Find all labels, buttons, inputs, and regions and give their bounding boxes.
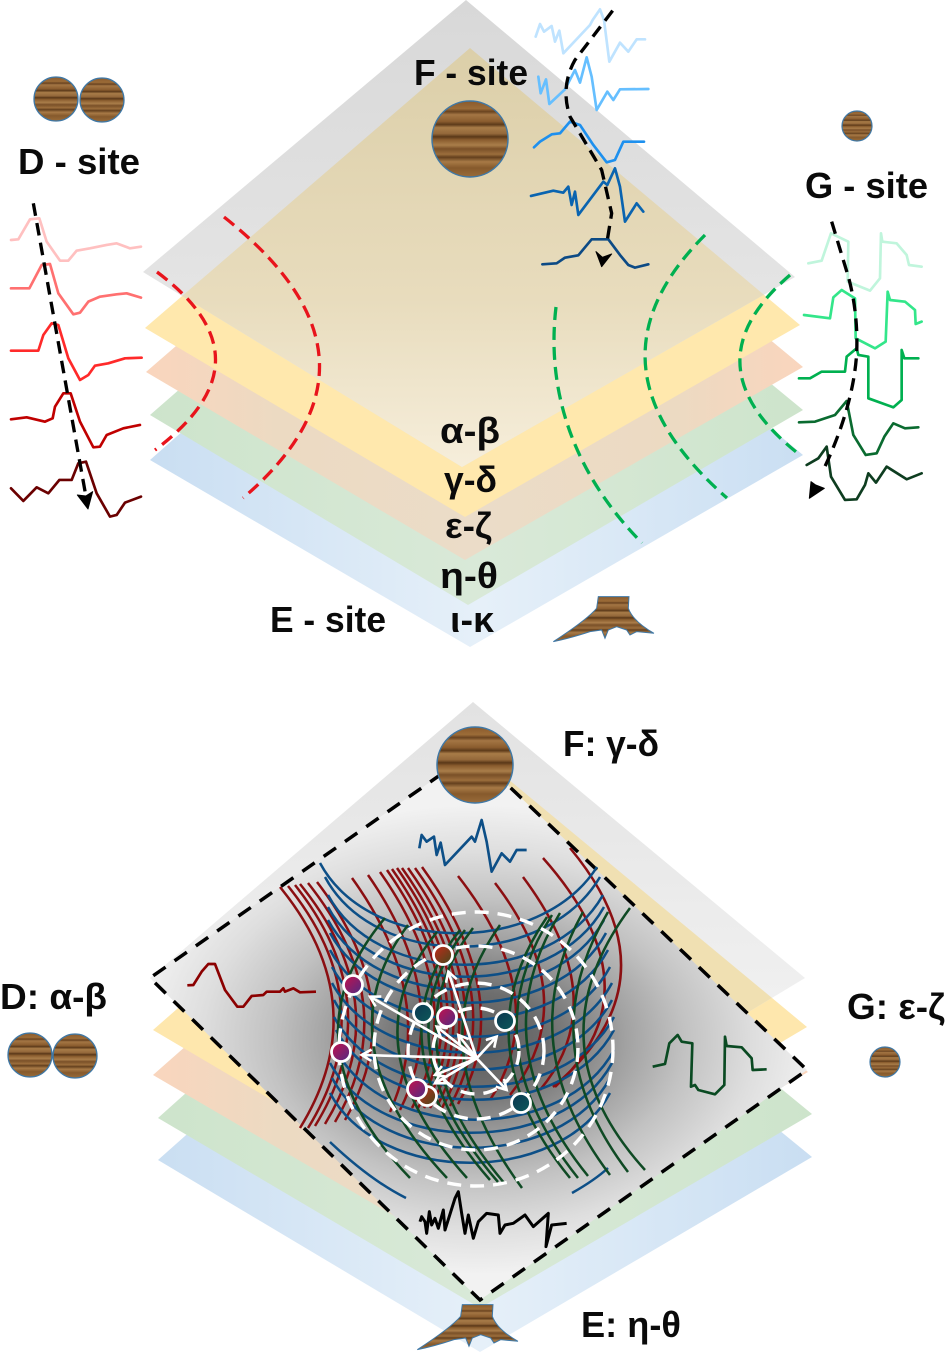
layer: grey <box>150 702 805 1175</box>
layer: ι-κ blue <box>150 178 803 647</box>
layer labels: α-β <box>440 410 500 451</box>
icon: E site stump <box>553 597 654 642</box>
icon: F site trunk <box>432 101 508 177</box>
label: E channel: E: η-θ <box>581 1304 681 1345</box>
blue wave-front arcs <box>320 863 614 1198</box>
icon: D site trunks <box>34 77 124 122</box>
icon: lower G trunk <box>870 1047 900 1077</box>
layer labels: γ-δ <box>444 459 497 500</box>
green wave-front arcs <box>338 908 645 1188</box>
heading: F site: F - site <box>414 52 528 93</box>
white arrows from source <box>362 972 507 1090</box>
layer labels: ε-ζ <box>445 505 492 546</box>
icon: G site trunk <box>842 111 872 141</box>
label: F channel: F: γ-δ <box>563 723 659 764</box>
layer: α-β grey <box>143 0 795 467</box>
heading: G site: G - site <box>805 165 928 206</box>
layer labels: ι-κ <box>450 599 495 640</box>
heading: E site: E - site <box>270 599 386 640</box>
layer labels: η-θ <box>440 555 498 596</box>
red dashed arcs around D site <box>155 217 320 498</box>
waveform: E channel <box>420 1192 567 1247</box>
layer: η-θ green <box>150 136 803 605</box>
waveforms: G site <box>799 222 922 500</box>
bottom stacked layers diagram <box>150 702 812 1352</box>
layer: γ-δ yellow <box>145 48 800 517</box>
waveform: G channel <box>653 1035 767 1094</box>
layer: yellow <box>153 750 807 1222</box>
heading: D site: D - site <box>18 141 140 182</box>
label: D channel: D: α-β <box>0 976 107 1017</box>
green dashed arcs around G site <box>554 235 800 543</box>
layer: blue <box>158 880 812 1352</box>
red wave-front arcs <box>280 848 621 1128</box>
arrow: D site propagation <box>33 203 93 509</box>
sensor nodes <box>332 946 530 1112</box>
arrow: F site propagation <box>566 11 613 267</box>
top stacked layers diagram <box>143 0 803 647</box>
layer: orange <box>153 793 808 1265</box>
layer: grey over yellow overlap <box>182 48 764 466</box>
layer labels <box>440 410 500 640</box>
icon: lower F trunk <box>437 727 513 803</box>
panel: dashed surface with shaded well <box>150 752 807 1300</box>
icon: lower D trunks <box>8 1033 97 1078</box>
icon: lower E stump <box>417 1305 518 1350</box>
waveforms: D site <box>11 203 142 517</box>
layer: ε-ζ orange <box>146 91 803 560</box>
label: G channel: G: ε-ζ <box>847 986 945 1027</box>
white dashed distance circles <box>339 912 613 1186</box>
waveform: D channel <box>187 964 316 1007</box>
arrow: G site propagation <box>809 222 857 498</box>
waveforms: F site <box>531 9 648 268</box>
waveform: F channel <box>419 820 527 872</box>
layer: green <box>158 836 812 1308</box>
layer: grey over yellow overlap <box>508 781 772 1012</box>
